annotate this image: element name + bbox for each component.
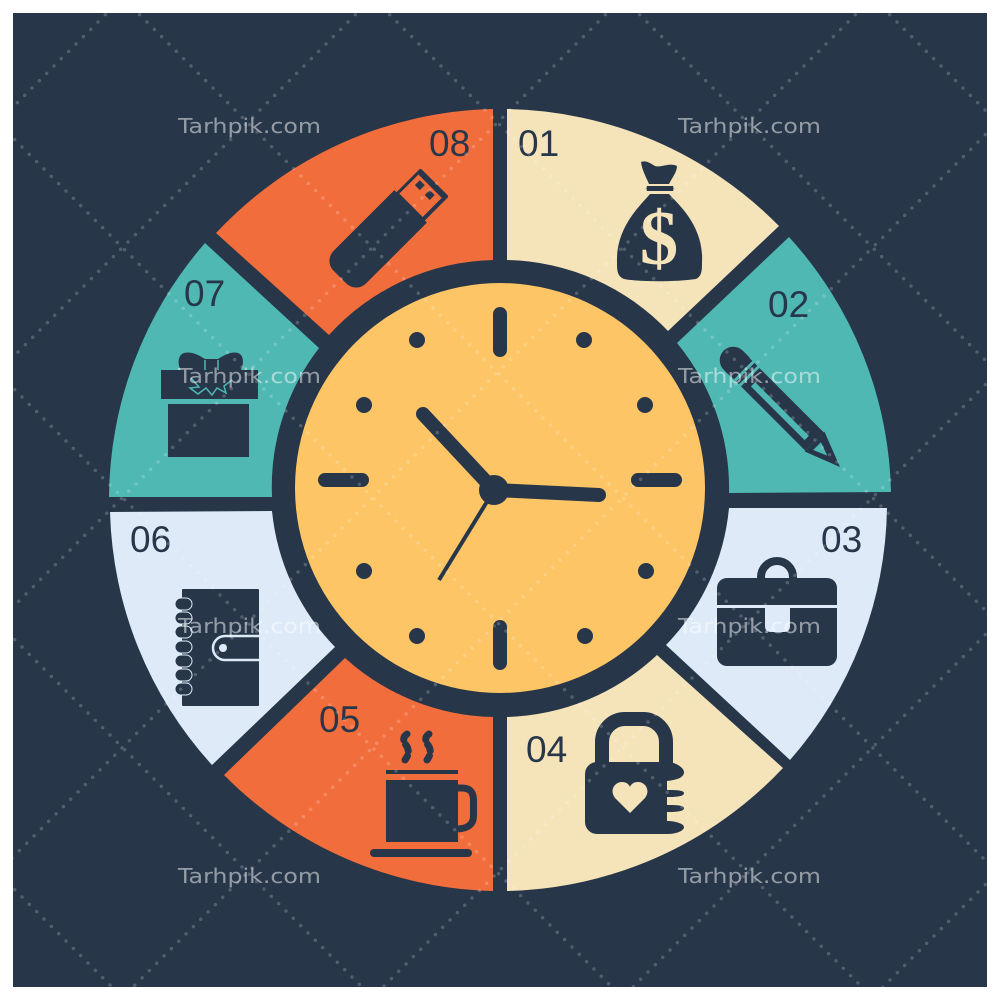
panel: segment 03 — [666, 508, 887, 760]
number 05: 05 — [319, 699, 360, 740]
watermark text: Tarhpik.com — [677, 364, 821, 388]
number 04: 04 — [526, 729, 567, 770]
icon: coffee cup — [370, 734, 474, 857]
panel: segment 06 — [110, 511, 335, 765]
icon: briefcase — [717, 561, 837, 666]
icon: money bag — [617, 161, 702, 281]
number 07: 07 — [184, 273, 225, 314]
watermark text: Tarhpik.com — [177, 114, 321, 138]
panel: segment 07 — [109, 243, 319, 497]
watermark text: Tarhpik.com — [677, 114, 821, 138]
icon: money bag: $ — [640, 195, 678, 281]
panel: segment 02 — [677, 237, 891, 493]
panel: segment 04 — [507, 655, 783, 891]
watermark text: Tarhpik.com — [177, 864, 321, 888]
watermark text — [177, 114, 821, 888]
clock face — [295, 283, 705, 693]
number 01: 01 — [518, 123, 559, 164]
panel: segment 01 — [507, 109, 779, 331]
hour ticks — [318, 307, 682, 670]
icon: pencil — [714, 341, 850, 477]
number 03: 03 — [821, 519, 862, 560]
watermark text: Tarhpik.com — [177, 614, 321, 638]
clock — [295, 283, 705, 693]
number 02: 02 — [768, 284, 809, 325]
icon: usb drive — [324, 166, 451, 293]
clock hands — [423, 414, 599, 580]
number 06: 06 — [130, 519, 171, 560]
icon: gift box — [161, 352, 258, 457]
panel: segment 08 — [216, 109, 493, 335]
watermark text: Tarhpik.com — [677, 864, 821, 888]
icon: spiral notebook — [175, 589, 259, 706]
icon: padlock with heart — [585, 719, 684, 834]
watermark text: Tarhpik.com — [677, 614, 821, 638]
panel: segment 05 — [224, 658, 493, 891]
watermark text: Tarhpik.com — [177, 364, 321, 388]
number 08: 08 — [429, 123, 470, 164]
